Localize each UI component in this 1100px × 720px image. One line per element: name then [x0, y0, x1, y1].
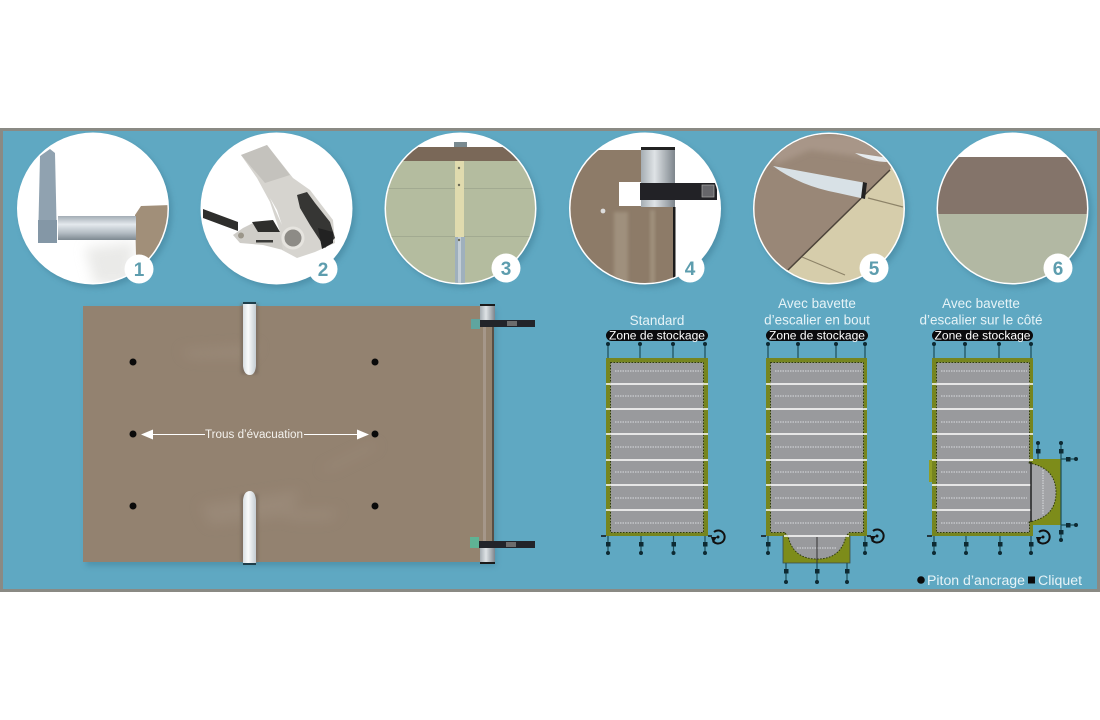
ratchet symbol	[711, 531, 725, 544]
cover plan	[766, 358, 867, 563]
storage zone label: Zone de stockage	[934, 330, 1030, 342]
bottom anchors	[601, 536, 712, 555]
ratchet symbol	[870, 530, 884, 543]
ratchet symbol	[1036, 531, 1050, 544]
legend: Piton d’ancrage	[927, 573, 1025, 588]
number badge 3: 3	[501, 259, 511, 280]
storage zone label: Zone de stockage	[609, 330, 705, 342]
heading: Avec bavette d'escalier sur le côté: Avec bavette	[942, 296, 1020, 311]
photo circle 2: ratchet buckle	[200, 132, 356, 288]
bottom and side anchors	[927, 441, 1078, 555]
number badge 2: 2	[318, 260, 328, 281]
arrows to drain holes	[141, 430, 369, 440]
number badge 2	[308, 254, 338, 284]
storage zone label: Zone de stockage	[769, 330, 865, 342]
number badge 6	[1044, 254, 1072, 282]
number badge 4	[676, 254, 704, 282]
diagram: side stair flap	[927, 330, 1078, 555]
cover plan	[929, 358, 1061, 536]
heading: Avec bavette d'escalier sur le côté: d’escalier sur le côté	[919, 312, 1043, 328]
top corner tube and strap	[471, 304, 535, 329]
number badge 1: 1	[134, 260, 145, 281]
strap slot bottom	[241, 491, 258, 565]
bottom anchors	[761, 536, 871, 584]
label: drain holes: Trous d’évacuation	[205, 429, 303, 441]
heading: Avec bavette d'escalier en bout: Avec bavette	[778, 296, 856, 311]
number badge 3	[492, 254, 520, 282]
cover plan	[606, 358, 708, 536]
drain holes	[130, 358, 378, 510]
heading: Standard: Standard	[630, 313, 684, 328]
top anchors	[606, 342, 707, 358]
top anchors	[766, 342, 867, 358]
number badge 5	[860, 254, 888, 282]
strap slot top	[241, 302, 258, 375]
heading: Avec bavette d'escalier en bout: d’escalier en bout	[764, 312, 870, 328]
photo circle 1: crank handle	[17, 132, 172, 288]
diagram: end stair flap	[761, 330, 884, 584]
bottom corner tube and strap	[470, 537, 535, 564]
photo circle 5: bar on cover beside paving	[750, 130, 910, 290]
number badge 4: 4	[685, 259, 696, 280]
panel: blue background with grey frame	[2, 130, 1098, 590]
diagram: Standard	[601, 330, 725, 555]
number badge 1	[124, 254, 154, 284]
photo circle 3: strap and tube on wall	[380, 132, 540, 291]
legend	[917, 573, 1082, 588]
top anchors	[932, 342, 1033, 358]
photo circle 4: cover corner with strap	[565, 132, 724, 290]
number badge 5: 5	[869, 259, 880, 280]
heading: Avec bavette d'escalier en bout	[764, 296, 870, 328]
large cover photo	[83, 302, 535, 566]
legend: Cliquet	[1038, 573, 1082, 588]
number badge 6: 6	[1053, 259, 1063, 280]
heading: Avec bavette d'escalier sur le côté	[919, 296, 1043, 328]
photo circle 6: cover edge on wall	[935, 132, 1092, 288]
